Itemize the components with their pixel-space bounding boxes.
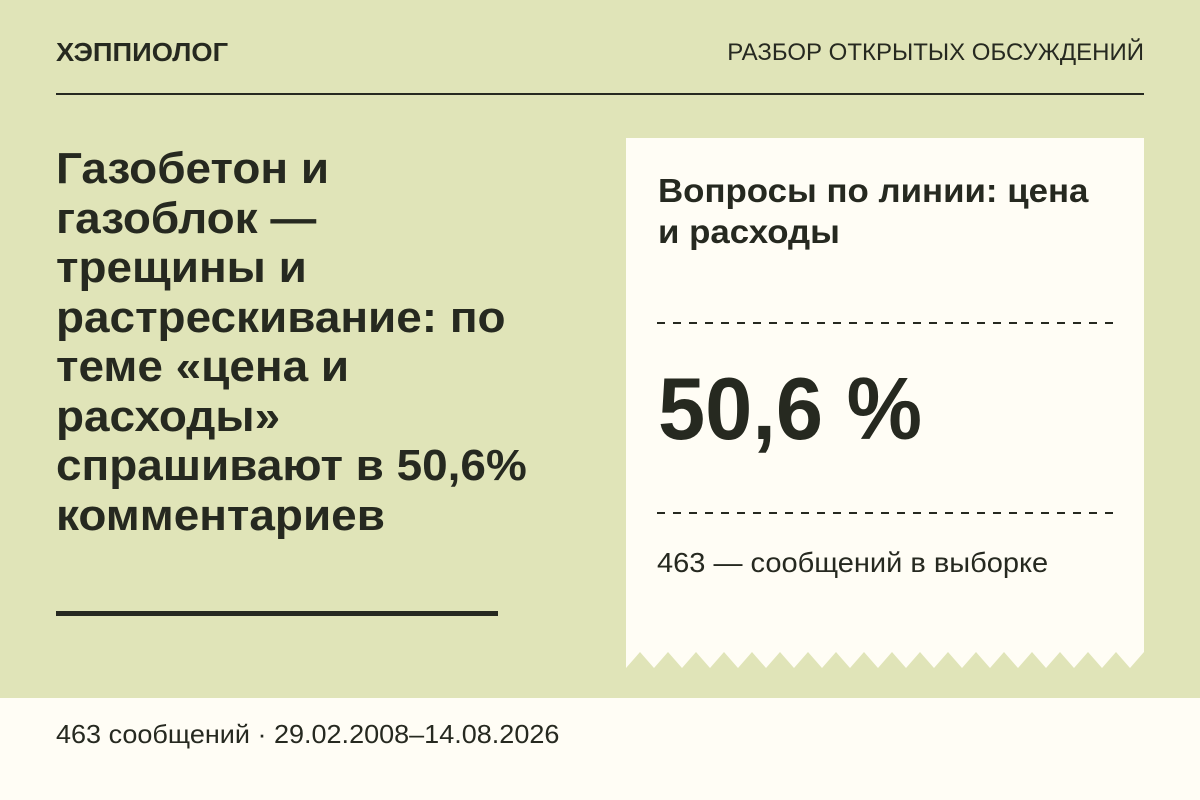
header rule: [56, 93, 1144, 95]
bottom dashed divider: [657, 512, 1113, 514]
main heading: комментариев: [56, 490, 385, 540]
footer band: [0, 698, 1200, 800]
main heading: [56, 144, 527, 540]
sample size note: 463 — сообщений в выборке: [657, 547, 1048, 578]
big percentage: 50,6 %: [658, 358, 922, 458]
panel: receipt card: [626, 138, 1144, 668]
card heading: и расходы: [658, 213, 840, 250]
brand name: ХЭППИОЛОГ: [56, 37, 228, 67]
card heading: Вопросы по линии: цена: [658, 172, 1088, 209]
main heading: расходы»: [56, 392, 280, 440]
heading underline: [56, 611, 498, 616]
main heading: растрескивание: по: [56, 292, 506, 342]
footer text: 463 сообщений · 29.02.2008–14.08.2026: [56, 719, 559, 749]
main heading: теме «цена и: [56, 342, 349, 391]
receipt background with zigzag edge: [626, 138, 1144, 668]
header subtitle: РАЗБОР ОТКРЫТЫХ ОБСУЖДЕНИЙ: [727, 39, 1144, 66]
main heading: спрашивают в 50,6%: [56, 441, 527, 490]
main heading: газоблок —: [56, 194, 316, 242]
card heading: [658, 172, 1089, 250]
main heading: Газобетон и: [56, 144, 329, 193]
main heading: трещины и: [56, 243, 307, 292]
top dashed divider: [657, 322, 1113, 324]
